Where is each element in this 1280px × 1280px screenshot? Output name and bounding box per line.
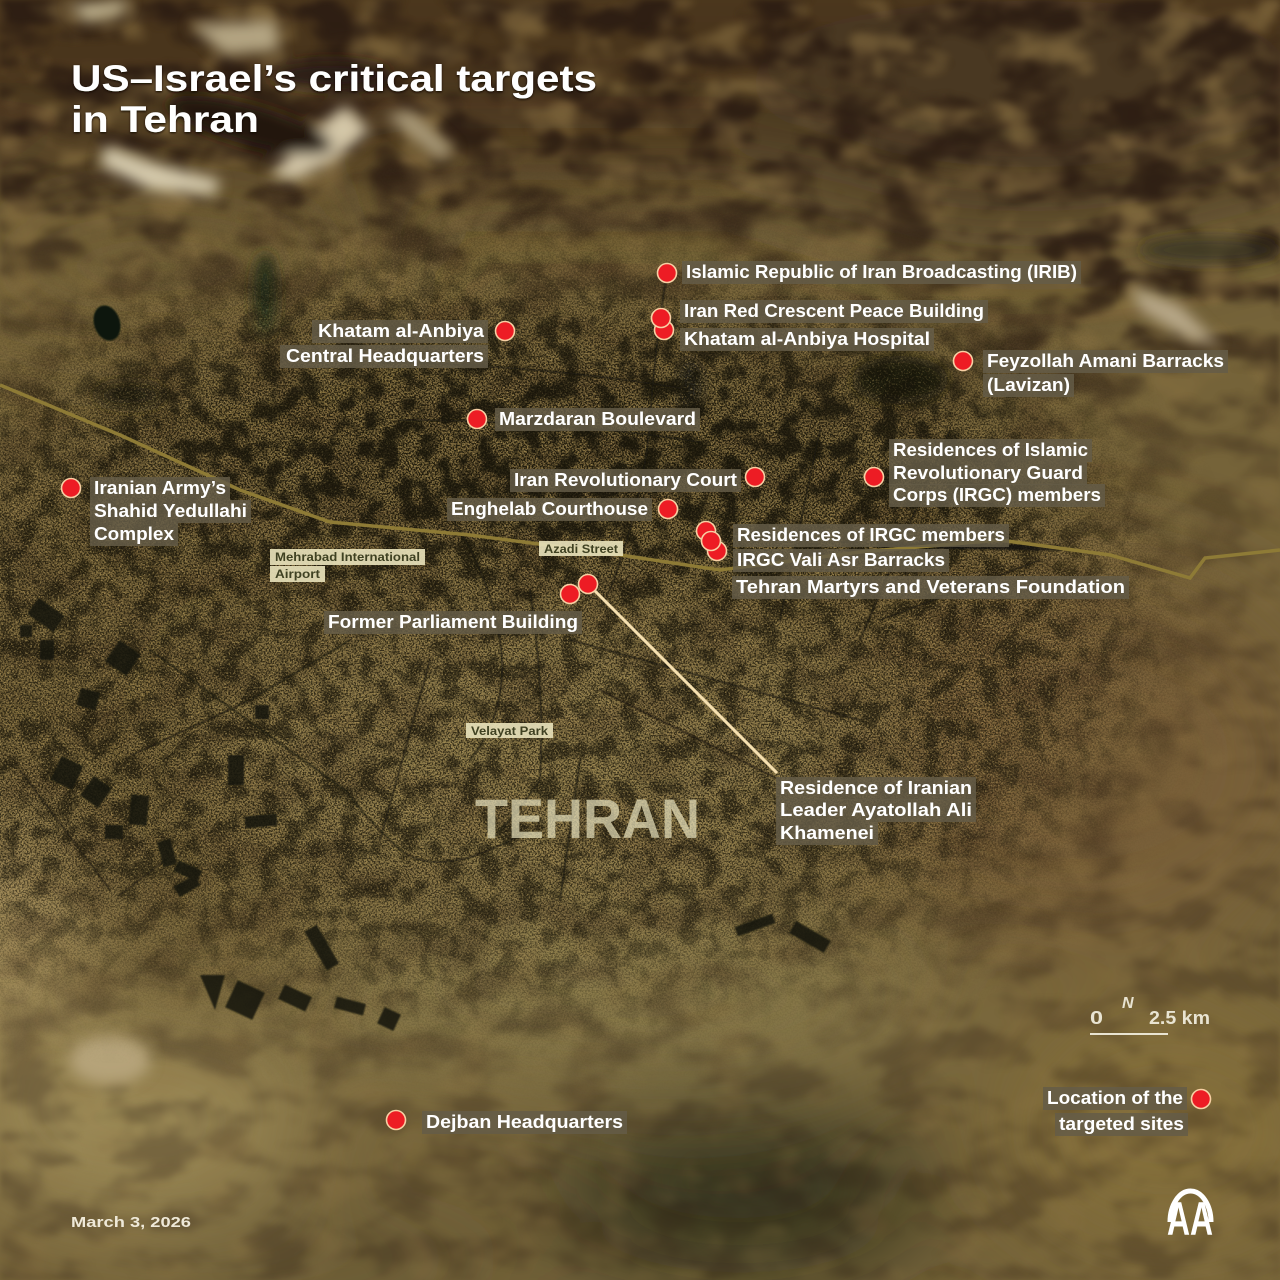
- road: Azadi Street: [0, 385, 1280, 578]
- label: Khatam al-Anbiya Central Headquarters: Central Headquarters: [286, 346, 484, 366]
- label: Shahid Yedullahi Complex: [90, 477, 251, 546]
- label: Residences of IRGC members (multi-line): Revolutionary Guard: [893, 463, 1083, 483]
- target markers: [62, 264, 972, 1130]
- label: Residences of IRGC members (multi-line): [889, 439, 1105, 507]
- label: Former Parliament Building: Former Parliament Building: [328, 612, 578, 632]
- map label: Mehrabad International Airport: Mehrabad International: [275, 550, 420, 564]
- label: Residences of IRGC members: Residences of IRGC members: [737, 525, 1005, 545]
- scale bar: [1090, 995, 1210, 1035]
- map label: Mehrabad International Airport: [270, 549, 425, 582]
- label: Residences of IRGC members (multi-line): Residences of Islamic: [893, 440, 1088, 460]
- map label: Velayat Park: Velayat Park: [471, 724, 548, 738]
- map label: Mehrabad International Airport: Airport: [275, 567, 320, 581]
- logo: Anadolu Agency: AA: [1167, 1192, 1213, 1245]
- label: Khamenei residence: [776, 777, 976, 845]
- label: Khatam al-Anbiya Central Headquarters: Khatam al-Anbiya: [318, 321, 485, 341]
- label: Khatam al-Anbiya Central Headquarters: [280, 320, 488, 368]
- map label: Azadi Street: Azadi Street: [544, 542, 618, 556]
- label: Iran Red Crescent Peace Building: Iran Red Crescent Peace Building: [684, 301, 984, 321]
- farmland plots: [20, 598, 831, 1031]
- legend: targeted sites: [1059, 1114, 1184, 1134]
- label: Dejban Headquarters: Dejban Headquarters: [426, 1112, 623, 1132]
- label: Marzdaran Boulevard: Marzdaran Boulevard: [499, 409, 696, 429]
- map label: TEHRAN: TEHRAN: [475, 787, 700, 850]
- label: Feyzollah Amani Barracks: Feyzollah Amani Barracks: [987, 351, 1224, 371]
- label: Khamenei residence: Residence of Iranian: [780, 778, 972, 798]
- leader line to Khamenei residence: [588, 584, 777, 773]
- label: Khatam al-Anbiya Hospital: Khatam al-Anbiya Hospital: [684, 329, 930, 349]
- legend: [1043, 1087, 1210, 1136]
- north indicator: N: [1122, 995, 1134, 1012]
- label: Shahid Yedullahi Complex: Complex: [94, 524, 174, 544]
- label: Shahid Yedullahi Complex: Iranian Army’s: [94, 478, 226, 498]
- label: Tehran Martyrs and Veterans Foundation: Tehran Martyrs and Veterans Foundation: [736, 577, 1125, 597]
- label: IRIB: Islamic Republic of Iran Broadcasting (IRIB): [686, 262, 1077, 282]
- title: in Tehran: [71, 99, 259, 140]
- label: Iran Revolutionary Court: Iran Revolutionary Court: [514, 470, 737, 490]
- label: Khamenei residence: Leader Ayatollah Ali: [780, 800, 972, 820]
- title: US–Israel’s critical targets: [71, 58, 597, 99]
- label: Enghelab Courthouse: Enghelab Courthouse: [451, 499, 648, 519]
- date: March 3, 2026: [71, 1214, 191, 1231]
- lake: [89, 302, 125, 344]
- label: Feyzollah Amani Barracks: [983, 350, 1228, 397]
- title: [71, 58, 597, 140]
- scale bar: 0: [1090, 1008, 1103, 1028]
- scale bar: 2.5 km: [1149, 1008, 1210, 1028]
- label: Feyzollah Amani Barracks: (Lavizan): [987, 375, 1070, 395]
- label: Khamenei residence: Khamenei: [780, 823, 874, 843]
- label: Shahid Yedullahi Complex: Shahid Yedullahi: [94, 501, 247, 521]
- label: IRGC Vali Asr Barracks: IRGC Vali Asr Barracks: [737, 550, 945, 570]
- label: Residences of IRGC members (multi-line): Corps (IRGC) members: [893, 485, 1101, 505]
- logo: Anadolu Agency: [1167, 1191, 1213, 1245]
- legend: Location of the: [1047, 1088, 1183, 1108]
